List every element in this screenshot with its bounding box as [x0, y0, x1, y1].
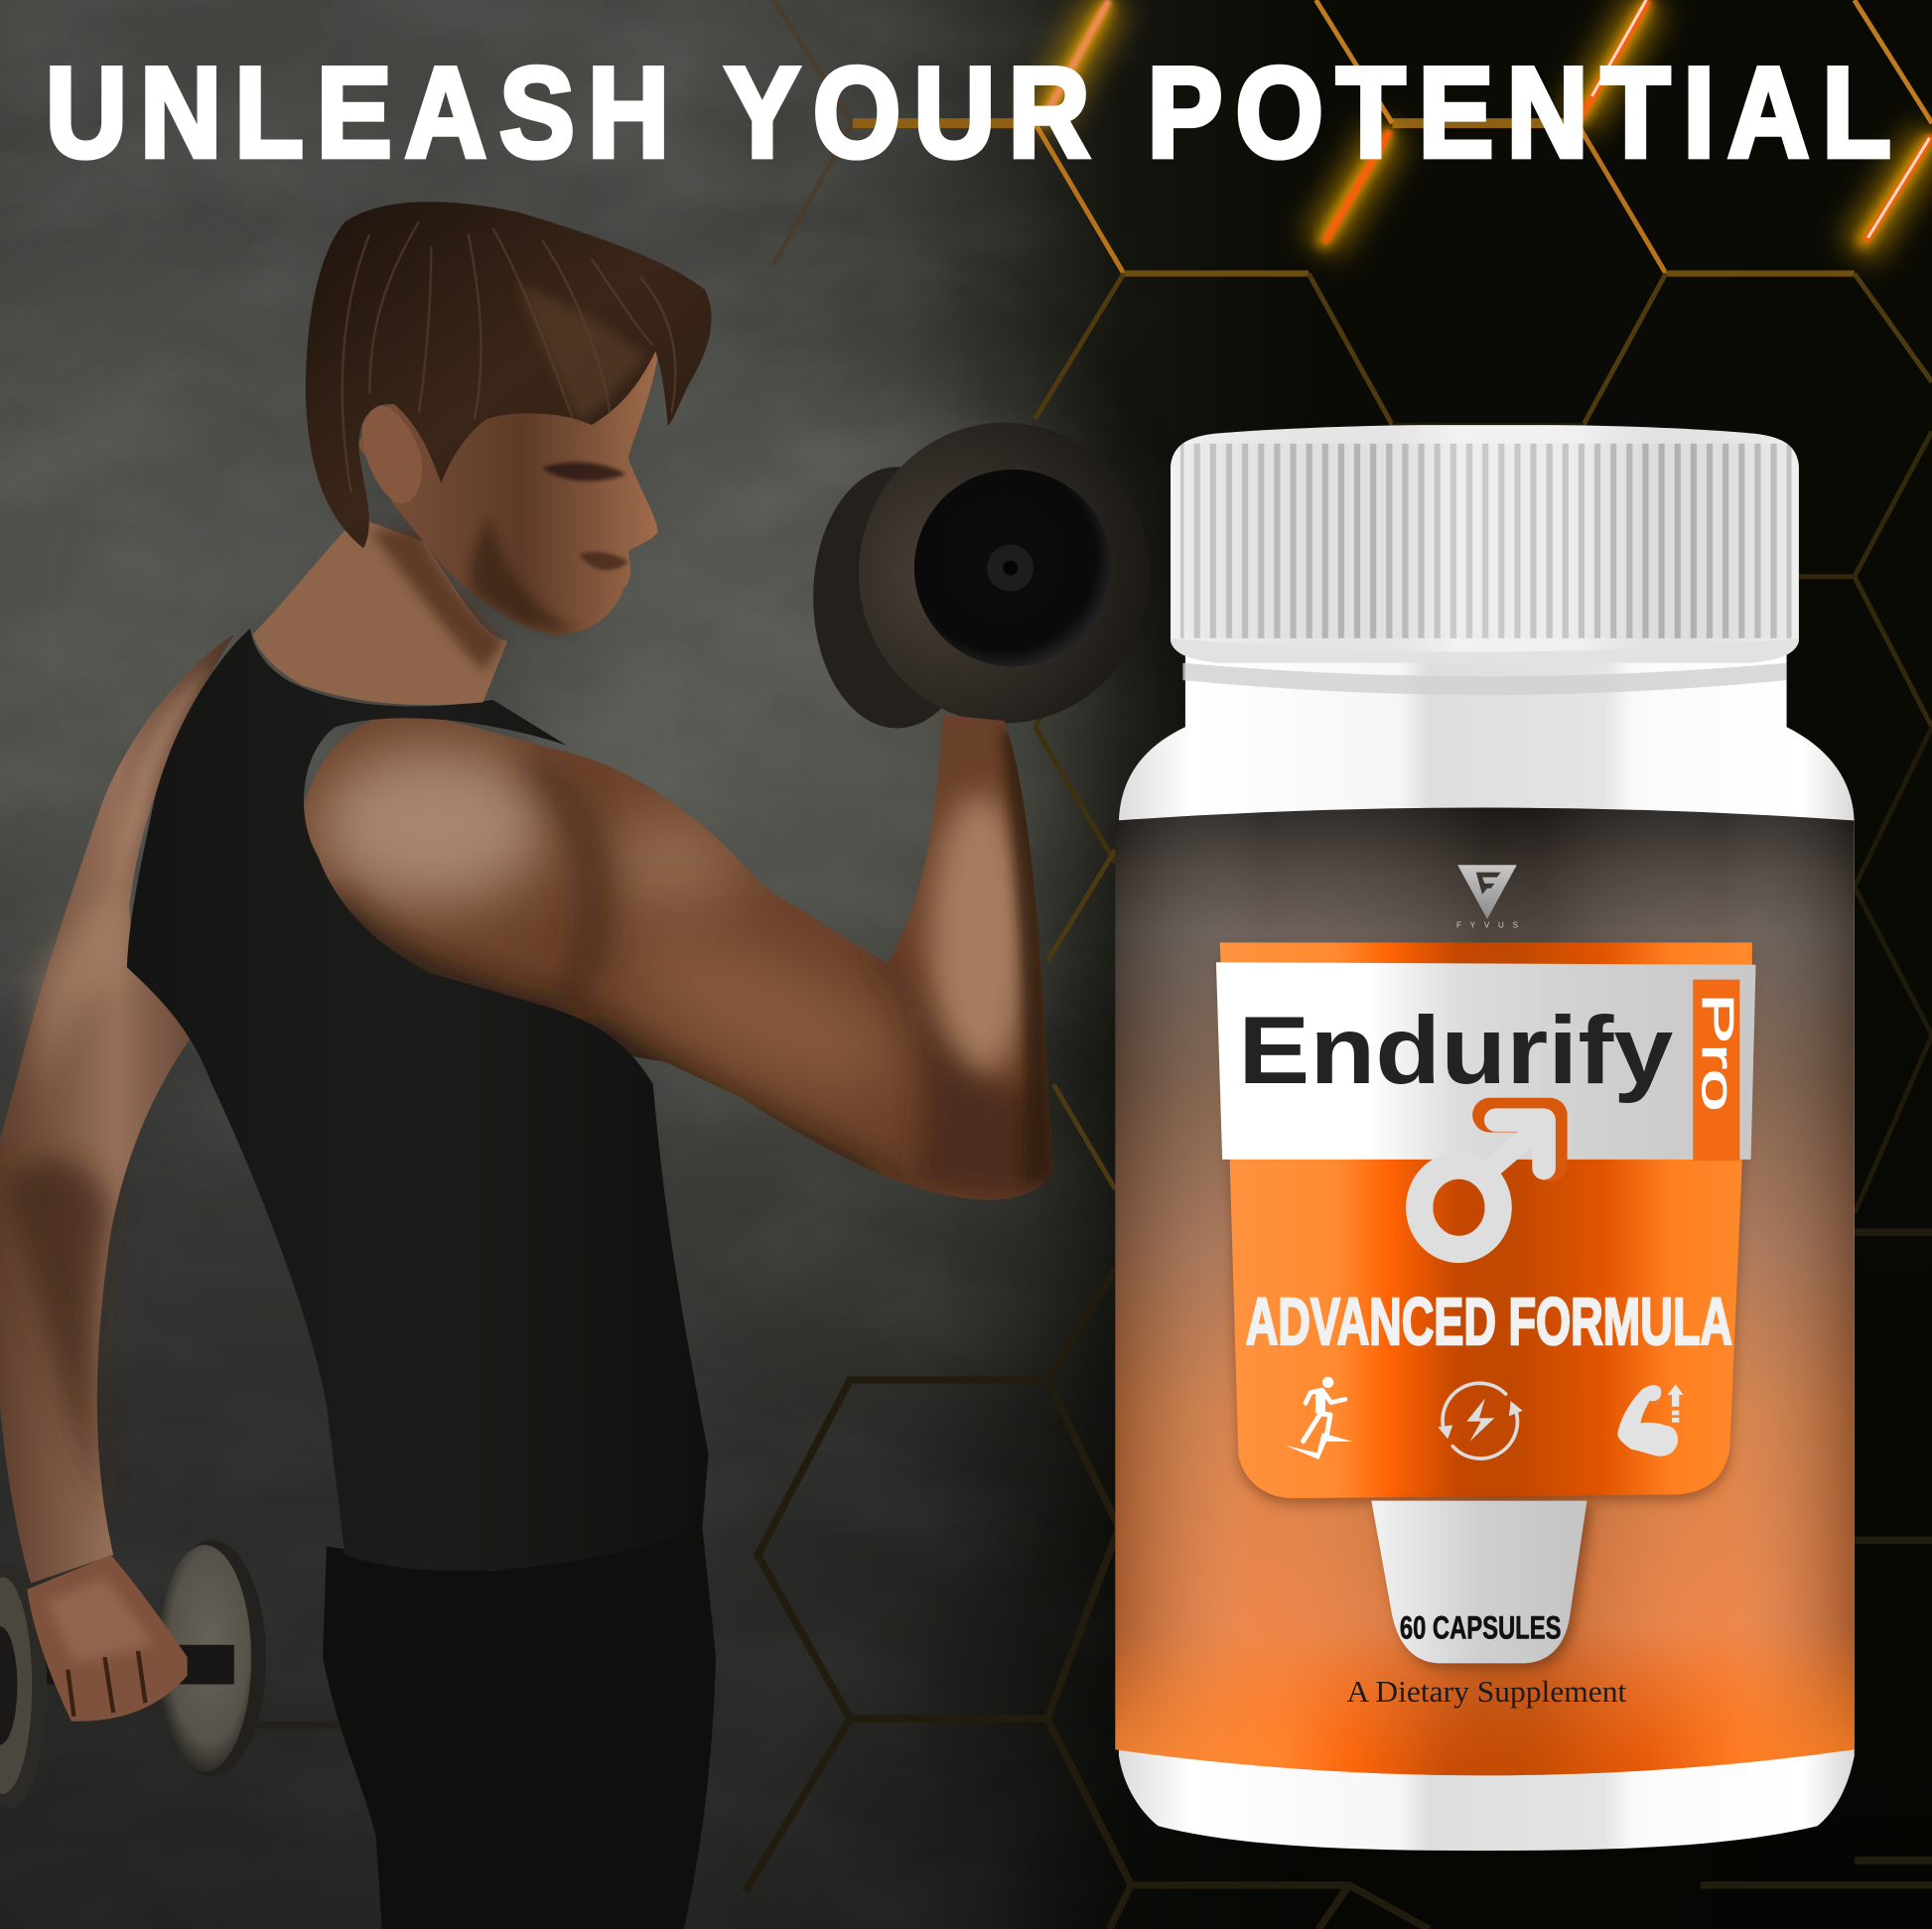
- tank top: [127, 628, 709, 1571]
- orange panel: [1220, 949, 1752, 1504]
- head: face: [357, 347, 659, 634]
- head: ear: [362, 405, 422, 503]
- icon: runner: [1286, 1377, 1353, 1459]
- white name band: [1216, 962, 1756, 1160]
- neck shadow bands: [1182, 663, 1787, 695]
- left arm and back skin: [0, 634, 234, 1584]
- hexagon grid, lower: [234, 1232, 1932, 1929]
- benefit icons: [1286, 1377, 1684, 1459]
- neck: [252, 517, 507, 705]
- left dumbbell: [0, 1540, 266, 1809]
- label body: [1115, 794, 1855, 1811]
- pro badge: [1693, 980, 1741, 1161]
- brand logo: FYVUS: [1456, 921, 1518, 930]
- brand logo: [1456, 865, 1518, 930]
- dietary supplement text: A Dietary Supplement: [1346, 1674, 1627, 1709]
- hexagon grid, upper: [773, 0, 1932, 1213]
- male symbol: [1420, 1115, 1550, 1249]
- bottle neck and shoulder: [1119, 653, 1855, 1851]
- flexed arm and shoulder: [304, 715, 1053, 1200]
- product name: Endurify: [1238, 996, 1674, 1104]
- right dumbbell: [813, 423, 1150, 728]
- supplement bottle: [1115, 425, 1855, 1851]
- man lifting dumbbells: [0, 202, 1150, 1929]
- capsule count tab: 60 CAPSULES: [1400, 1610, 1561, 1646]
- shorts: [323, 1528, 716, 1929]
- background: smoke and dark gradient: [0, 0, 1185, 1929]
- hand on lower dumbbell: [27, 1555, 188, 1722]
- cap: [1171, 425, 1799, 665]
- title: UNLEASH YOUR POTENTIAL: [46, 41, 1891, 184]
- capsule count tab: [1371, 1501, 1591, 1668]
- icon: flexed muscle with arrow: [1617, 1384, 1684, 1456]
- head: hair: [306, 202, 712, 548]
- pro badge: Pro: [1693, 993, 1741, 1111]
- icon: energy cycle: [1438, 1383, 1523, 1458]
- glowing neon hex segments: [1041, 0, 1932, 252]
